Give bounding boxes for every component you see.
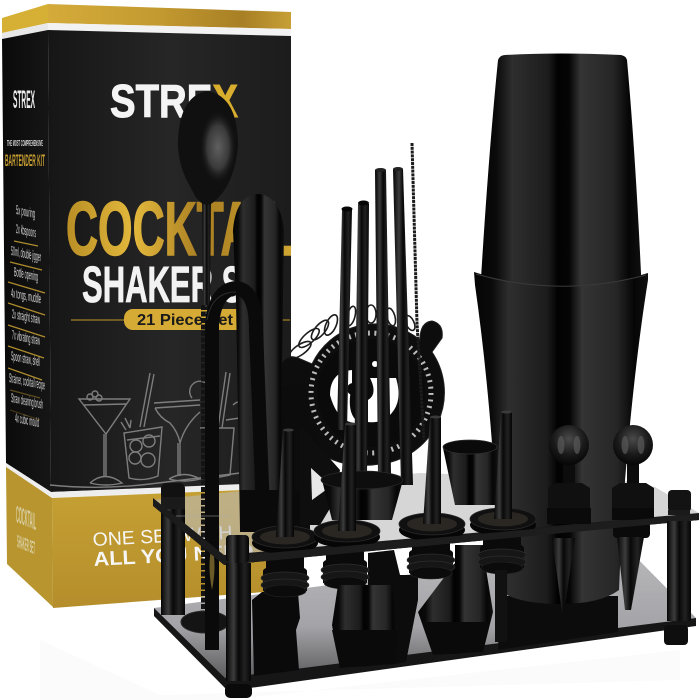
pourer 3 rings [407,538,455,579]
rack: front left post [225,535,252,698]
product box [2,4,292,608]
rack: right post [664,490,691,645]
product box: 4x tongs, muddle [11,285,41,306]
product box: STREX [13,86,35,114]
badge: 21 piece set [71,309,290,330]
white area behind tools on the right of the box [292,0,492,480]
reflections in mirror plate [252,550,618,676]
jigger: rear cup [443,440,497,505]
product box: Straw cleaning brush [11,390,43,412]
straw 1 [337,210,352,430]
spoon highlight [200,111,236,183]
tool bodies below top plate [261,533,526,668]
line art: cocktail glasses [50,372,241,487]
product box: 50ml, double jigger [11,243,41,264]
box base: gold band: ALL YOU NEED [93,541,254,571]
jigger with handle [332,585,398,668]
box top gold band [2,4,291,39]
pourer 2 rings [321,548,369,589]
strainer [280,305,444,530]
stopper 1 [547,425,591,612]
wine stoppers [547,425,654,612]
upper tin [480,54,642,295]
pourer 3 [399,416,465,541]
rack: rear left post [161,483,185,615]
strainer opening [330,370,360,423]
product box: Strainer, cocktail recipe [9,370,45,393]
cleaning brush [412,143,424,440]
strainer ring and handles [280,321,444,466]
box base: gold band: SHAKER SET [17,531,35,558]
spoon bowl [178,91,238,205]
box front panel [48,30,292,492]
ice tongs [207,288,263,650]
badge: 21 piece set: 21 Piece Set [137,312,233,329]
straw 4 [393,169,413,485]
straws and cleaning brush [337,143,424,485]
pourer 4 rings [478,533,526,574]
rack: top plate edges [153,498,699,565]
muddler [233,194,300,532]
side contents list [9,202,45,430]
floor reflection [40,640,680,700]
rack: front edge of top plate over stopper bases [224,514,699,565]
double jigger [418,545,493,655]
spoon disc [181,611,229,633]
spoon twisted stem [202,196,211,310]
product box: Spoon straw, shell [11,348,40,369]
box base: gold band: COCKTAIL [16,501,36,536]
jigger: front cup [321,471,403,520]
pourer 2 [314,422,380,548]
lower tin [474,272,648,604]
product box: BARTENDER KIT [5,151,45,170]
bar spoon [178,91,238,633]
pourers: discs and spouts above plate [252,410,536,554]
product box: 2x straight straw [12,306,40,327]
strainer support stack [280,385,335,530]
title: shaker set: SHAKER SET [82,256,282,313]
rack: top plate glass surface [153,473,699,557]
box side panel [2,30,51,492]
pourer 4 [470,410,536,536]
rack: bottom mirror plate [154,546,696,688]
straw 2 [354,204,369,475]
straw 3 [375,170,391,475]
title: cocktail: COCKTAIL [66,187,292,272]
box side panel: 5x pouring [16,202,35,221]
tagline: ONE SET WITH [92,523,233,551]
box base: gold band [6,463,291,608]
pourer 1 rings [261,556,309,597]
product box: 7x vibrating straw [12,327,40,348]
product box: Bottle opening [14,264,38,284]
stopper 2 [612,425,654,610]
brand logo: STREX [110,75,238,127]
product box: THE MOST COMPREHENSIVE [7,139,43,148]
pourer 1 [252,428,318,554]
product box: 2x kbspoons [16,221,36,240]
gap beside strainer support [311,468,330,500]
strainer spring coil [286,305,417,362]
cocktail shaker [474,54,648,604]
product box: 4x cubic mould [15,410,39,430]
